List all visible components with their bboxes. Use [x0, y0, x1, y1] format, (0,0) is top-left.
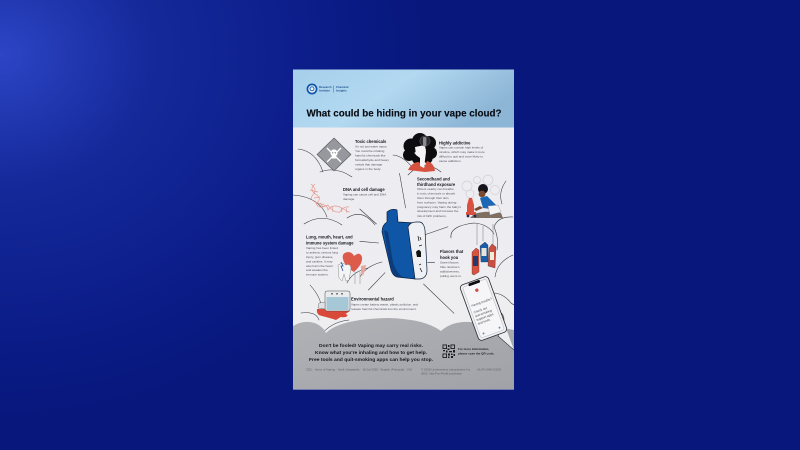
icon: DNA helix: [310, 184, 350, 213]
panel: lung, mouth, heart, and immune system damage: injury, gum disease,: [306, 255, 333, 259]
icon: phone with quit app: and tools.: [477, 317, 491, 326]
title: What could be hiding in your vape cloud?: [306, 109, 502, 120]
panel: lung, mouth, heart, and immune system damage: Vaping has been linked: [306, 246, 338, 250]
panel: toxic chemicals: [317, 138, 389, 171]
call to action: Don't be fooled! Vaping may carry real risks.: [319, 343, 423, 349]
panel: highly addictive: Vapes can contain high levels of: [439, 145, 483, 149]
icon: heart and tooth: [338, 252, 366, 284]
panel: lung, mouth, heart, and immune system damage: to asthma, serious lung: [306, 250, 338, 254]
panel: toxic chemicals: organs in the body.: [355, 167, 381, 171]
call to action: Know what you're inhaling and how to get help.: [315, 350, 427, 356]
poster: [293, 70, 514, 390]
grey cloud footer: [293, 318, 514, 389]
logo: Research: [319, 85, 332, 89]
panel: flavors that hook you: pulling users in.: [440, 274, 462, 278]
panel: secondhand and thirdhand exposure: pregnancy may harm the baby's: [417, 205, 461, 209]
icon: child with toy and smoke: [462, 175, 503, 218]
call to action: [309, 343, 433, 363]
panel: flavors that hook you: hook you: [440, 255, 459, 260]
QR caption: For more information,: [458, 347, 489, 351]
panel: toxic chemicals: It's not just water vapor.: [355, 144, 388, 148]
panel: highly addictive: Highly addictive: [439, 140, 471, 145]
QR caption: please scan the QR code.: [458, 351, 495, 355]
panel: lung, mouth, heart, and immune system damage: [306, 234, 366, 284]
icon: phone with quit app: [459, 276, 514, 350]
panel: lung, mouth, heart, and immune system damage: also harm the heart: [306, 264, 333, 268]
panel: toxic chemicals: formaldehyde and heavy: [355, 158, 389, 162]
panel: toxic chemicals: You could be inhaling: [355, 149, 385, 153]
panel: secondhand and thirdhand exposure: Others nearby can breathe: [417, 187, 454, 191]
header band: [293, 70, 514, 128]
panel: lung, mouth, heart, and immune system damage: and cavities. It may: [306, 259, 333, 263]
panel: DNA and cell damage: [310, 184, 387, 213]
icon: woman vaping: [403, 133, 437, 172]
icon: phone with quit app: Having trouble?: [471, 297, 493, 308]
icon: phone with quit app: Check out: [473, 306, 488, 314]
panel: flavors that hook you: Flavors that: [440, 249, 464, 254]
panel: lung, mouth, heart, and immune system damage: and weaken the: [306, 268, 328, 272]
footer small print: © 2025 Underwriters Laboratories Inc.: [421, 369, 471, 372]
panel: secondhand and thirdhand exposure: Secondhand and: [417, 176, 450, 181]
panel: lung, mouth, heart, and immune system damage: immune system damage: [306, 240, 354, 245]
panel: environmental hazard: [317, 291, 418, 320]
panel: flavors that hook you: Sweet flavors: [440, 260, 459, 264]
icon: phone with quit app: support apps: [476, 312, 494, 322]
logo: [307, 84, 349, 94]
panel: secondhand and thirdhand exposure: them through their skin: [417, 196, 449, 200]
panel: toxic chemicals: Toxic chemicals: [355, 139, 387, 144]
panel: secondhand and thirdhand exposure: [417, 175, 503, 218]
panel: environmental hazard: Environmental hazard: [351, 296, 394, 301]
panel: flavors that hook you: addictiveness,: [440, 269, 460, 273]
panel: secondhand and thirdhand exposure: in toxic chemicals or absorb: [417, 192, 455, 196]
poster paper: [293, 70, 514, 390]
panel: highly addictive: nicotine, which may make it more: [439, 150, 485, 154]
icon: vape device: [382, 209, 427, 279]
panel: secondhand and thirdhand exposure: development and increase the: [417, 209, 459, 213]
footer small print: CDC · Items of Vaping · Adult Infographic · 16-Jul-2025 · English (Principal) · V10: [306, 369, 413, 372]
panel: highly addictive: [403, 133, 485, 172]
panel: DNA and cell damage: DNA and cell damage: [343, 187, 385, 192]
panel: toxic chemicals: harmful chemicals like: [355, 153, 386, 157]
logo: Institute: [319, 89, 330, 93]
logo: Chemical: [336, 85, 349, 89]
cloud outlines: [293, 149, 513, 335]
panel: lung, mouth, heart, and immune system damage: Lung, mouth, heart, and: [306, 234, 353, 239]
panel: highly addictive: cause addiction.: [439, 159, 461, 163]
logo: Insights: [336, 89, 347, 93]
panel: environmental hazard: Vapes create battery waste, plastic pollution, and: [351, 302, 418, 306]
panel: secondhand and thirdhand exposure: from surfaces. Vaping during: [417, 200, 457, 204]
icon: QR code: [442, 344, 455, 358]
icon: phone with quit app: quit-smoking: [474, 308, 493, 318]
panel: secondhand and thirdhand exposure: risk of birth problems.: [417, 214, 447, 218]
panel: lung, mouth, heart, and immune system damage: immune system.: [306, 272, 329, 276]
panel: highly addictive: difficult to quit and more likely to: [439, 154, 483, 158]
panel: DNA and cell damage: Vaping can cause cell and DNA: [343, 192, 387, 196]
call to action: Free tools and quit-smoking apps can help you stop.: [309, 357, 433, 363]
icon: spilled vape: [317, 291, 350, 320]
icon: hanging flavor bottles: [472, 224, 496, 275]
panel: toxic chemicals: metals that damage: [355, 162, 382, 166]
panel: environmental hazard: release harmful chemicals into the environment.: [351, 307, 417, 311]
QR caption: [458, 347, 495, 355]
connector lines: [360, 173, 454, 313]
icon: skull diamond: [317, 138, 351, 171]
panel: flavors that hook you: hide nicotine's: [440, 265, 460, 269]
footer small print: SDS: Not-For-Profit purchase: [421, 373, 463, 376]
panel: secondhand and thirdhand exposure: thirdhand exposure: [417, 182, 456, 187]
panel: DNA and cell damage: damage.: [343, 197, 355, 201]
panel: flavors that hook you: [440, 224, 496, 278]
footer small print: [306, 369, 502, 376]
footer small print: ULRI-VAD-0125: [477, 369, 502, 372]
